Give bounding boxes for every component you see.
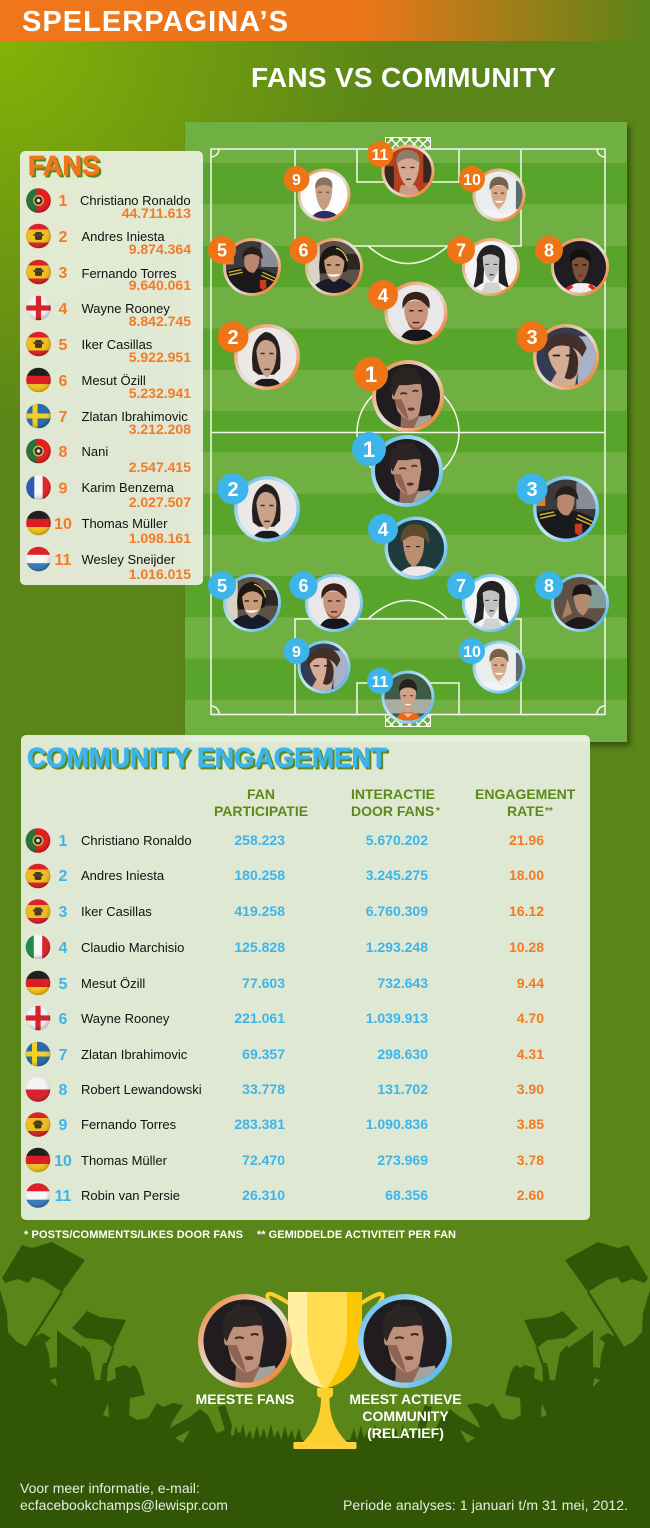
player: community 10 Muller: 10 <box>463 644 481 661</box>
community row 9 <box>25 1112 544 1138</box>
player: fans 7 Ibrahimovic: 7 <box>456 240 466 260</box>
column headers: PARTICIPATIE <box>214 803 308 819</box>
fans row 7: 7 <box>59 409 68 426</box>
community row 9: 1.090.836 <box>366 1116 428 1132</box>
column headers: DOOR FANS <box>351 803 434 819</box>
community row 11 <box>25 1182 544 1209</box>
column headers: FAN <box>247 786 275 802</box>
player: community 5 Ozil <box>208 572 281 632</box>
community row 5: Mesut Özill <box>81 976 145 991</box>
trophy bowl <box>288 1292 362 1388</box>
player: community 11 Van Persie <box>367 668 434 724</box>
community row 9: 9 <box>59 1117 68 1134</box>
fans row 7 <box>26 403 191 437</box>
fans row 9: Karim Benzema <box>82 480 175 495</box>
player: fans 6 Ozil <box>290 236 363 296</box>
community row 4: Claudio Marchisio <box>81 940 184 955</box>
community row 8: 8 <box>59 1082 68 1099</box>
player: fans 1 Ronaldo: 1 <box>365 362 377 387</box>
player: fans 11 Sneijder <box>367 141 434 198</box>
fans row 3: 9.640.061 <box>129 277 191 293</box>
community row 6: Wayne Rooney <box>81 1011 170 1026</box>
player: fans 11 Sneijder: 11 <box>372 147 389 164</box>
community row 2: Andres Iniesta <box>81 868 165 883</box>
community row 10: 72.470 <box>242 1152 285 1168</box>
player: community 2 Iniesta <box>218 474 300 542</box>
community row 7: 7 <box>59 1047 68 1064</box>
fans row 4 <box>26 295 191 329</box>
column headers: RATE <box>507 803 544 819</box>
community row 5 <box>25 970 544 996</box>
community row 7 <box>25 1041 544 1067</box>
player: fans 3 Torres: 3 <box>526 327 538 349</box>
player: community 2 Iniesta: 2 <box>227 479 239 501</box>
trophy handles <box>267 1294 383 1305</box>
fans row 4: Wayne Rooney <box>82 301 170 316</box>
community row 10: Thomas Müller <box>81 1153 168 1168</box>
player: fans 4 Rooney: 4 <box>378 286 389 307</box>
community row 2: 18.00 <box>509 867 544 883</box>
community row 8: 33.778 <box>242 1081 285 1097</box>
column headers <box>214 786 576 819</box>
community row 4 <box>25 934 544 960</box>
fans row 4: 4 <box>59 301 68 318</box>
community row 11: 11 <box>55 1188 72 1205</box>
footer contact: ecfacebookchamps@lewispr.com <box>20 1497 228 1513</box>
panel: fans ranking <box>20 150 203 585</box>
footnotes: * POSTS/COMMENTS/LIKES DOOR FANS <box>24 1229 243 1241</box>
player: fans 8 Nani <box>535 236 609 296</box>
fans row 4: 8.842.745 <box>129 313 191 329</box>
community row 4: 10.28 <box>509 939 544 955</box>
fans row 11: 11 <box>55 552 72 569</box>
community row 5: 77.603 <box>242 975 285 991</box>
fans row 10 <box>26 510 191 546</box>
community row 11: 26.310 <box>242 1187 285 1203</box>
player: community 4 Marchisio <box>368 514 448 580</box>
community row 10: 10 <box>54 1153 72 1170</box>
fans row 2: 2 <box>59 229 68 246</box>
player: community 9 Torres: 9 <box>292 644 301 661</box>
player: community 9 Torres <box>284 638 350 694</box>
fans row 3 <box>26 259 191 293</box>
fans row 2 <box>26 223 191 257</box>
fans row 5: Iker Casillas <box>82 337 153 352</box>
community row 11: Robin van Persie <box>81 1188 180 1203</box>
footer contact <box>20 1480 228 1513</box>
player: community 3 Casillas: 3 <box>526 479 538 501</box>
community row 8: 3.90 <box>517 1081 544 1097</box>
label: meest actieve community: MEEST ACTIEVE <box>349 1391 462 1407</box>
community row 4: 1.293.248 <box>366 939 428 955</box>
player: fans 9 Benzema: 9 <box>292 172 301 189</box>
fans row 7: Zlatan Ibrahimovic <box>82 409 188 424</box>
player: community 5 Ozil: 5 <box>217 576 227 596</box>
community row 5: 9.44 <box>517 975 544 991</box>
community row 1: 5.670.202 <box>366 832 428 848</box>
player: fans 6 Ozil: 6 <box>298 240 309 260</box>
trophy base <box>294 1442 356 1449</box>
player: community 7 Ibrahimovic: 7 <box>456 576 466 596</box>
column headers: INTERACTIE <box>351 786 435 802</box>
crowd silhouette <box>0 1242 650 1528</box>
community row 3: 6.760.309 <box>366 903 428 919</box>
community row 3: 3 <box>59 904 68 921</box>
fans row 1 <box>26 188 191 221</box>
winner portrait: meeste fans <box>198 1294 292 1388</box>
community row 1: 258.223 <box>234 832 285 848</box>
community row 2: 180.258 <box>234 867 285 883</box>
player: fans 3 Torres <box>516 322 599 390</box>
panel title: community engagement: COMMUNITY ENGAGEMENT <box>29 744 389 775</box>
community row 6: 4.70 <box>517 1010 544 1026</box>
footnotes <box>24 1229 456 1241</box>
player: community 4 Marchisio: 4 <box>378 520 389 541</box>
fans row 1: 44.711.613 <box>122 205 191 221</box>
player: community 6 Rooney <box>290 572 363 632</box>
community row 11: 2.60 <box>517 1187 544 1203</box>
fans row 8: 2.547.415 <box>129 459 191 475</box>
community row 10 <box>25 1147 544 1173</box>
fans row 8: Nani <box>82 444 108 459</box>
player: fans 5 Casillas: 5 <box>217 240 227 260</box>
community row 10: 3.78 <box>517 1152 544 1168</box>
community row 2: 2 <box>59 868 68 885</box>
community row 11: 68.356 <box>385 1187 428 1203</box>
community row 3: 419.258 <box>234 903 285 919</box>
label: meest actieve community <box>349 1391 462 1441</box>
community row 9: 3.85 <box>517 1116 544 1132</box>
fans row 1: 1 <box>59 193 68 210</box>
community row 9: Fernando Torres <box>81 1117 177 1132</box>
fans row 7: 3.212.208 <box>129 421 191 437</box>
fans row 6: 6 <box>59 373 68 390</box>
fans row 10: 1.098.161 <box>129 530 191 546</box>
community row 7: 69.357 <box>242 1046 285 1062</box>
community row 1: 21.96 <box>509 832 544 848</box>
label: meest actieve community: (RELATIEF) <box>367 1425 444 1441</box>
community row 5: 5 <box>59 976 68 993</box>
community row 1 <box>25 828 544 854</box>
player: community 3 Casillas <box>516 474 599 542</box>
fans row 5: 5.922.951 <box>129 349 191 365</box>
player: community 7 Ibrahimovic <box>447 572 520 632</box>
community row 2 <box>25 863 544 889</box>
fans row 1: Christiano Ronaldo <box>80 193 191 208</box>
trophy stem <box>303 1388 347 1442</box>
community row 9: 283.381 <box>234 1116 285 1132</box>
fans row 9: 2.027.507 <box>129 494 191 510</box>
fans row 11 <box>26 546 191 582</box>
player: fans 10 Muller: 10 <box>463 172 481 189</box>
fans row 6 <box>26 367 191 401</box>
panel title: fans: FANS <box>30 152 102 183</box>
community row 6 <box>25 1005 544 1031</box>
heading: spelerpagina's: SPELERPAGINA’S <box>22 6 288 38</box>
community row 6: 1.039.913 <box>366 1010 428 1026</box>
community row 8 <box>25 1076 544 1102</box>
header bar <box>0 0 650 41</box>
community row 10: 273.969 <box>377 1152 428 1168</box>
player: community 10 Muller <box>459 638 526 694</box>
fans row 3: Fernando Torres <box>82 266 177 281</box>
panel title: community engagement: COMMUNITY ENGAGEMENT <box>27 742 387 773</box>
player: community 8 Lewandowski <box>535 572 609 632</box>
player: fans 4 Rooney <box>368 280 448 344</box>
community row 7: Zlatan Ibrahimovic <box>81 1047 188 1062</box>
community row 5: 732.643 <box>377 975 428 991</box>
player: fans 10 Muller <box>459 166 526 222</box>
panel title: fans: FANS <box>28 150 100 181</box>
player: fans 9 Benzema <box>284 166 350 222</box>
fans row 11: 1.016.015 <box>129 566 191 582</box>
fans row 8: 8 <box>59 444 68 461</box>
fans row 8 <box>26 438 191 475</box>
column headers: ** <box>545 806 553 817</box>
community row 3 <box>25 898 544 924</box>
player: fans 2 Iniesta <box>218 322 300 390</box>
player: community 8 Lewandowski: 8 <box>544 576 554 596</box>
player: community 1 Ronaldo <box>352 432 443 507</box>
fans row 9: 9 <box>59 480 68 498</box>
label: meeste fans: MEESTE FANS <box>196 1391 294 1407</box>
community row 4: 125.828 <box>234 939 285 955</box>
fans row 6: Mesut Özill <box>82 373 146 388</box>
community row 7: 298.630 <box>377 1046 428 1062</box>
winner portrait: meest actieve community <box>358 1294 452 1388</box>
column headers: ENGAGEMENT <box>475 786 576 802</box>
fans row 10: 10 <box>54 516 72 533</box>
player: fans 7 Ibrahimovic <box>447 236 520 296</box>
player: fans 5 Casillas <box>208 236 281 296</box>
community row 1: 1 <box>59 833 68 850</box>
community row 6: 221.061 <box>234 1010 285 1026</box>
fans row 2: Andres Iniesta <box>82 229 165 244</box>
community row 7: 4.31 <box>517 1046 544 1062</box>
player: community 1 Ronaldo: 1 <box>363 437 375 462</box>
fans row 3: 3 <box>59 265 68 282</box>
community row 4: 4 <box>59 940 68 957</box>
player: fans 8 Nani: 8 <box>544 240 554 260</box>
community row 2: 3.245.275 <box>366 867 428 883</box>
footer analysis period: Periode analyses: 1 januari t/m 31 mei, 2012. <box>343 1497 628 1513</box>
community row 8: 131.702 <box>377 1081 428 1097</box>
fans row 5 <box>26 331 191 365</box>
fans row 5: 5 <box>59 337 68 354</box>
player: fans 2 Iniesta: 2 <box>227 327 239 349</box>
player: community 11 Van Persie: 11 <box>372 674 389 691</box>
community row 6: 6 <box>59 1011 68 1028</box>
fans row 6: 5.232.941 <box>129 385 191 401</box>
heading: fans vs community: FANS VS COMMUNITY <box>251 62 556 93</box>
label: meest actieve community: COMMUNITY <box>362 1408 449 1424</box>
fans row 11: Wesley Sneijder <box>82 552 176 567</box>
trophy <box>267 1292 383 1449</box>
fans row 10: Thomas Müller <box>82 516 168 531</box>
community row 8: Robert Lewandowski <box>81 1082 202 1097</box>
player: fans 1 Ronaldo <box>354 357 444 432</box>
footer contact: Voor meer informatie, e-mail: <box>20 1480 200 1496</box>
footnotes: ** GEMIDDELDE ACTIVITEIT PER FAN <box>257 1229 456 1241</box>
fans row 2: 9.874.364 <box>129 241 191 257</box>
football pitch <box>185 122 630 746</box>
community row 1: Christiano Ronaldo <box>81 833 192 848</box>
player: community 6 Rooney: 6 <box>298 576 309 596</box>
panel: community engagement table <box>21 735 590 1220</box>
community row 3: Iker Casillas <box>81 904 152 919</box>
community row 3: 16.12 <box>509 903 544 919</box>
fans row 9 <box>26 474 191 510</box>
column headers: * <box>436 806 440 817</box>
